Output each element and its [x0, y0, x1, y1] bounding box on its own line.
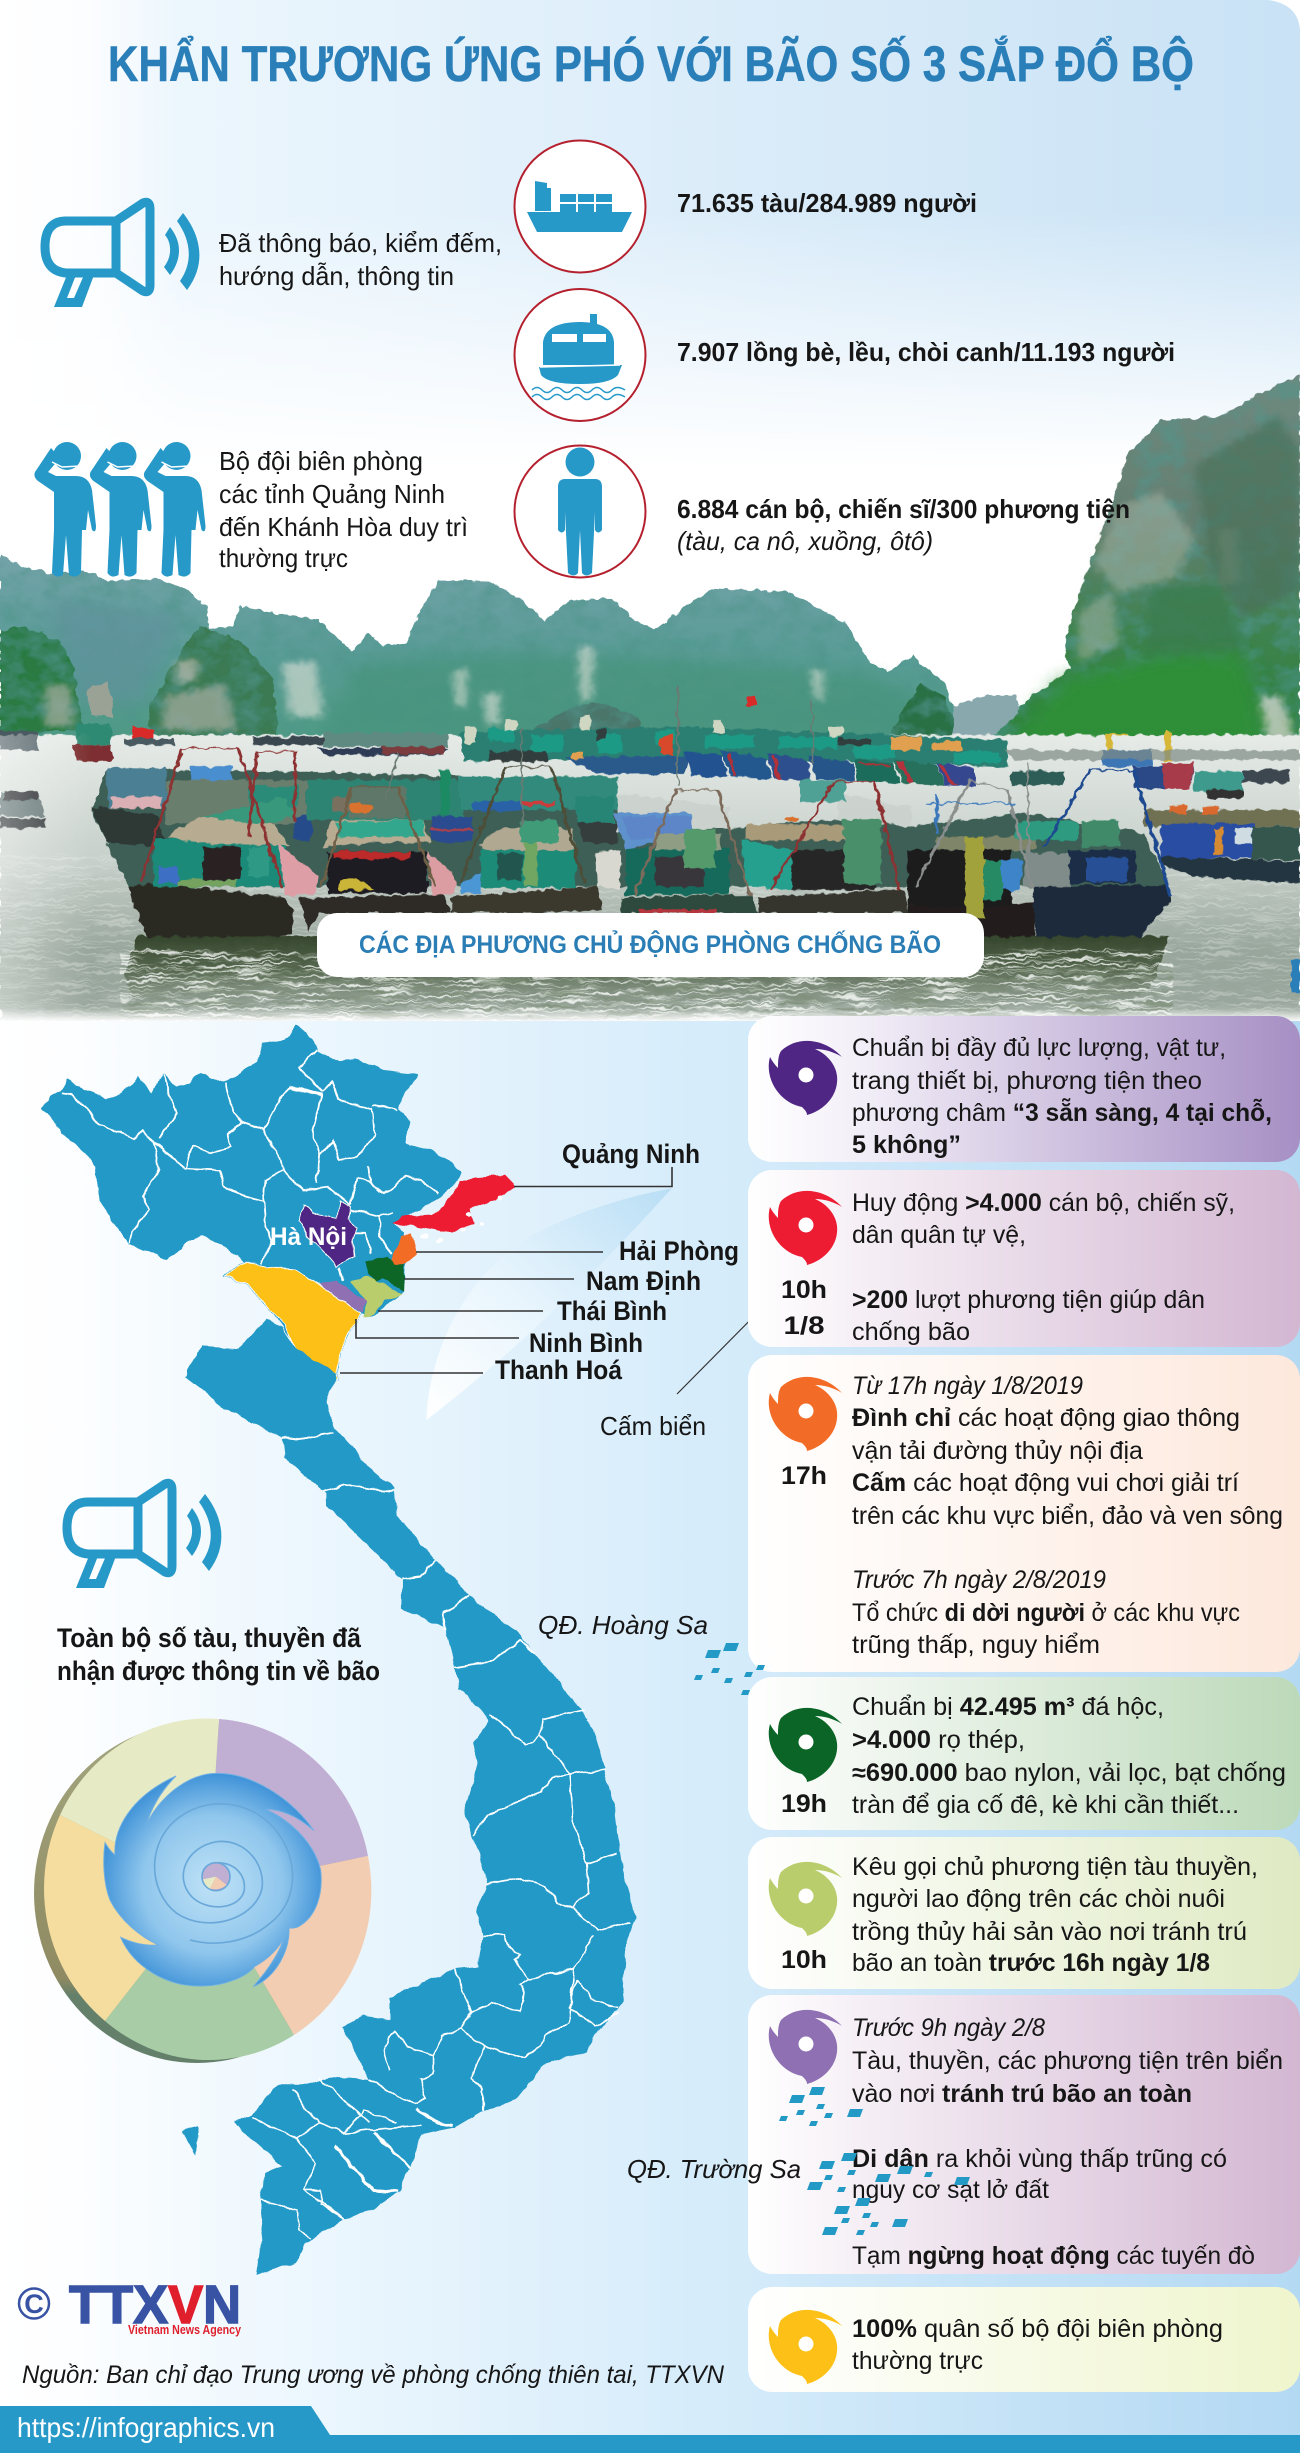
photo caption: CÁC ĐỊA PHƯƠNG CHỦ ĐỘNG PHÒNG CHỐNG BÃO — [359, 929, 941, 959]
logo: TTXVN: C — [24, 2289, 44, 2319]
card text: chống bão — [852, 1318, 970, 1346]
province: Hà Nội — [299, 1200, 357, 1267]
card text: vào nơi tránh trú bão an toàn — [852, 2080, 1192, 2108]
pie segment: peach — [208, 1856, 371, 2035]
icon: storm purple — [769, 1041, 842, 1115]
pie segment: yellow — [44, 1815, 208, 2021]
card text — [852, 1853, 1258, 1977]
text: border guards: các tỉnh Quảng Ninh — [219, 479, 445, 509]
card text: vận tải đường thủy nội địa — [852, 1437, 1143, 1465]
card text — [852, 1034, 1272, 1159]
province: Quảng Ninh — [393, 1175, 516, 1233]
time: 10h 1/8: 10h — [781, 1276, 827, 1304]
footer band: https://infographics.vn — [17, 2412, 275, 2443]
province labels: Quảng Ninh — [562, 1139, 700, 1169]
card text: >200 lượt phương tiện giúp dân — [852, 1286, 1205, 1314]
card text: >4.000 rọ thép, — [852, 1726, 1025, 1754]
stat: officers and vehicles — [677, 494, 1130, 556]
province: Nam Định — [366, 1257, 404, 1292]
card text: trồng thủy hải sản vào nơi tránh trú — [852, 1918, 1247, 1946]
province labels: Hải Phòng — [619, 1236, 739, 1266]
icon: storm lime — [769, 1862, 842, 1936]
card text: Cấm các hoạt động vui chơi giải trí — [852, 1469, 1239, 1497]
boats mid row — [91, 767, 1300, 937]
card: border guards on duty — [748, 2287, 1300, 2392]
boat 1 cabin — [153, 838, 286, 887]
icon: cargo ship in circle — [514, 140, 646, 272]
province labels: Nam Định — [586, 1266, 701, 1296]
card text: trên các khu vực biển, đảo và ven sông — [852, 1502, 1283, 1530]
logo: TTXVN: TTXVN — [69, 2275, 241, 2335]
background: sky — [116, 0, 1300, 426]
source: Nguồn: Ban chỉ đạo Trung ương về phòng chống thiên tai, TTXVN — [22, 2361, 725, 2389]
card text: Tàu, thuyền, các phương tiện trên biển — [852, 2047, 1283, 2075]
province labels: Thái Bình — [557, 1296, 667, 1326]
icon: storm light purple — [769, 2010, 842, 2084]
card text — [852, 2014, 1283, 2270]
card text: Tổ chức di dời người ở các khu vực — [852, 1599, 1240, 1627]
card text: dân quân tự vệ, — [852, 1221, 1026, 1249]
card text: nguy cơ sạt lở đất — [852, 2176, 1049, 2204]
card text: Từ 17h ngày 1/8/2019 — [852, 1372, 1083, 1400]
islands: Quảng Ninh coast — [420, 1197, 502, 1242]
text: notification: hướng dẫn, thông tin — [219, 261, 454, 291]
time: 10h 1/8 — [781, 1276, 827, 1340]
icon: megaphone lower — [67, 1483, 221, 1588]
card: mobilise — [748, 1170, 1300, 1347]
time: 17h: 17h — [781, 1462, 827, 1490]
boat 5 cabin — [742, 840, 796, 890]
map: Vietnam — [42, 1025, 636, 2275]
province: Ninh Bình — [319, 1280, 368, 1313]
card text: trũng thấp, nguy hiểm — [852, 1631, 1100, 1659]
foreground hulls — [128, 883, 294, 937]
card text: Tạm ngừng hoạt động các tuyến đò — [852, 2242, 1255, 2270]
text: border guards: đến Khánh Hòa duy trì — [219, 512, 468, 542]
pie segment: purple — [208, 1719, 368, 1889]
card text: Di dân ra khỏi vùng thấp trũng có — [852, 2145, 1227, 2173]
text: border guards: Bộ đội biên phòng — [219, 446, 423, 476]
chart: pie with storm — [34, 1719, 371, 2063]
card text: phương châm “3 sẵn sàng, 4 tại chỗ, — [852, 1097, 1272, 1127]
card text: Trước 9h ngày 2/8 — [852, 2014, 1045, 2042]
reflections — [120, 936, 1173, 1020]
boat 6 cabin — [908, 850, 1011, 907]
time: 10h: 10h — [781, 1946, 827, 1974]
right boat — [1144, 810, 1300, 827]
label: Hà Nội: Hà Nội — [270, 1223, 347, 1251]
card: evacuation — [748, 1995, 1300, 2274]
footer band — [0, 2406, 1300, 2453]
icon: storm orange — [769, 1377, 842, 1451]
card text: Huy động >4.000 cán bộ, chiến sỹ, — [852, 1189, 1235, 1217]
card: call boats to shelter — [748, 1837, 1300, 1989]
text: border guards: thường trực — [219, 543, 348, 573]
card text — [852, 1189, 1235, 1346]
card text: tràn để gia cố đê, kè khi cần thiết... — [852, 1791, 1239, 1819]
boat 4 cabin — [626, 848, 730, 895]
logo: TTXVN: Vietnam News Agency — [128, 2322, 242, 2337]
card text: thường trực — [852, 2347, 983, 2375]
card text: bão an toàn trước 16h ngày 1/8 — [852, 1949, 1210, 1977]
card text — [852, 1372, 1283, 1659]
card text: trang thiết bị, phương tiện theo — [852, 1067, 1202, 1095]
province labels: Thanh Hoá — [495, 1355, 623, 1385]
storm swirl — [104, 1773, 321, 1987]
card text: Kêu gọi chủ phương tiện tàu thuyền, — [852, 1853, 1258, 1881]
card text: người lao động trên các chòi nuôi — [852, 1885, 1225, 1913]
card text: Đình chỉ các hoạt động giao thông — [852, 1404, 1240, 1432]
pie segment: green — [105, 1889, 294, 2060]
label: Hoàng Sa: QĐ. Hoàng Sa — [538, 1610, 708, 1640]
islands: Trường Sa — [779, 2087, 970, 2235]
icon: fishing boat in circle — [514, 289, 646, 421]
label: sea ban: Cấm biển — [600, 1411, 706, 1441]
boat 2 cabin — [327, 852, 427, 893]
map: northern region — [42, 1025, 516, 1378]
icon: saluting soldiers — [34, 442, 205, 577]
icon: megaphone — [45, 202, 199, 307]
text: notification — [219, 228, 502, 291]
card: prepare forces — [748, 1016, 1300, 1162]
boat 3 cabin — [481, 850, 576, 888]
text: all vessels informed: nhận được thông tin về bão — [57, 1656, 380, 1686]
card text: Chuẩn bị 42.495 m³ đá hộc, — [852, 1693, 1164, 1721]
card text — [852, 2315, 1223, 2375]
map: southern region — [182, 1700, 636, 2275]
stat: officers and vehicles: (tàu, ca nô, xuồng, ôtô) — [677, 526, 933, 556]
text: all vessels informed: Toàn bộ số tàu, thuyền đã — [57, 1623, 362, 1653]
icon: storm green — [769, 1708, 842, 1782]
background boats — [0, 697, 1300, 828]
time: 19h: 19h — [781, 1790, 827, 1818]
text: all vessels informed — [57, 1623, 380, 1686]
card text: ≈690.000 bao nylon, vải lọc, bạt chống — [852, 1759, 1286, 1787]
icon: storm red — [769, 1191, 842, 1265]
text: border guards — [219, 446, 468, 573]
photo: boats in Ha Long bay — [0, 375, 1300, 1022]
card: materials — [748, 1677, 1300, 1830]
stat: ships: 71.635 tàu/284.989 người — [677, 188, 977, 218]
time: 10h 1/8: 1/8 — [784, 1312, 825, 1340]
label: Trường Sa: QĐ. Trường Sa — [627, 2154, 801, 2184]
photo caption — [317, 913, 984, 977]
province: Hải Phòng — [391, 1233, 417, 1265]
province: Thái Bình — [350, 1277, 402, 1318]
stat: fish cages: 7.907 lồng bè, lều, chòi canh/11.193 người — [677, 337, 1175, 367]
card text: 100% quân số bộ đội biên phòng — [852, 2315, 1223, 2343]
leader lines — [340, 1167, 772, 1394]
islands: Hoàng Sa — [694, 1643, 765, 1695]
province: Thanh Hoá — [224, 1262, 362, 1378]
province labels: Ninh Bình — [529, 1328, 643, 1358]
decorative swoosh — [426, 1188, 672, 1420]
icon: storm yellow — [769, 2310, 842, 2384]
card text: 5 không” — [852, 1131, 961, 1159]
text: notification: Đã thông báo, kiểm đếm, — [219, 228, 502, 258]
icon: person in circle — [514, 446, 646, 578]
card text: Chuẩn bị đầy đủ lực lượng, vật tư, — [852, 1034, 1226, 1062]
background: lower panel — [0, 1021, 1300, 2453]
map: central region — [184, 1319, 589, 1720]
province labels — [495, 1139, 739, 1385]
pie segment: pale green — [60, 1719, 219, 1889]
stat: officers and vehicles: 6.884 cán bộ, chiến sĩ/300 phương tiện — [677, 494, 1130, 524]
card: bans — [748, 1355, 1300, 1672]
card text: Trước 7h ngày 2/8/2019 — [852, 1566, 1106, 1594]
masts and frames — [141, 687, 1171, 897]
card text — [852, 1693, 1286, 1819]
